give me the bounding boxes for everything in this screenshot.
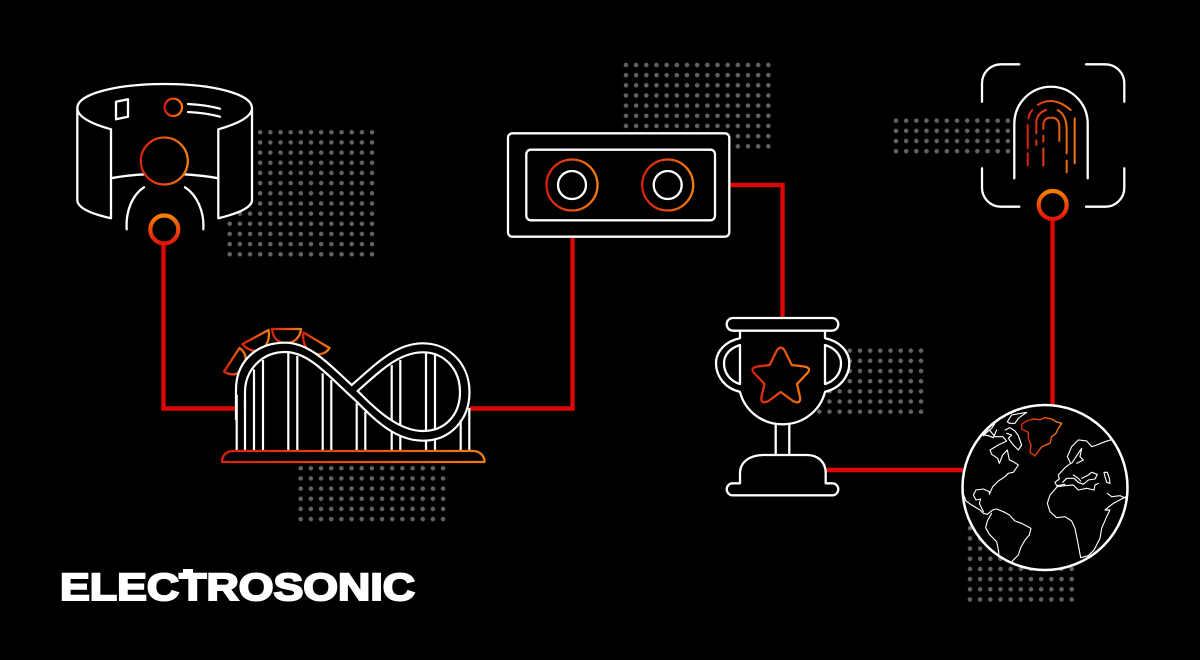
dot pattern: below roller coaster (296, 463, 448, 524)
star (752, 348, 809, 402)
icon: roller coaster (222, 329, 484, 462)
globe disc (962, 405, 1128, 570)
handle inner cut (724, 345, 841, 384)
small gradient circle (165, 99, 182, 116)
node ring (150, 216, 178, 244)
fingerprint ridges (1028, 101, 1075, 172)
right lens (642, 160, 693, 210)
top rim (727, 318, 838, 331)
icon: fingerprint scanner (982, 64, 1124, 219)
track fill mask (236, 343, 470, 441)
node ring (1039, 191, 1067, 219)
person shoulders (127, 187, 203, 229)
floor arcs (111, 174, 218, 178)
coaster cars (224, 329, 330, 374)
base (727, 455, 838, 495)
cylinder mask (77, 84, 252, 218)
outer track (236, 343, 470, 441)
dot pattern: left of fingerprint (891, 116, 1013, 156)
dot pattern: behind trophy (814, 346, 926, 417)
connector: trophy to globe (825, 468, 963, 472)
connector: immersive screen to roller coaster (164, 244, 237, 408)
continents (963, 412, 1126, 563)
person head (141, 138, 188, 184)
small panel rectangle (116, 99, 128, 119)
connector: camera panel to trophy (730, 185, 782, 319)
outer panel (508, 133, 729, 237)
scanner corner brackets (982, 64, 1124, 207)
support columns (237, 352, 469, 450)
trophy handles (716, 338, 849, 392)
dot pattern: behind cylinder screen (225, 127, 377, 259)
icon: camera panel (508, 133, 729, 237)
cup mask (740, 331, 825, 424)
inner loop (358, 352, 460, 431)
connector: fingerprint to globe (1050, 218, 1055, 406)
stylised t ascender (183, 569, 193, 577)
inner panel (526, 150, 715, 220)
text lines (188, 104, 220, 117)
icon: immersive cylinder screen (77, 84, 252, 244)
icon: globe (962, 405, 1128, 570)
stem (776, 424, 789, 455)
left lens (546, 160, 598, 210)
dot pattern: behind camera panel (621, 60, 774, 152)
cup outline (740, 331, 825, 424)
connector: roller coaster to camera panel (470, 236, 572, 408)
coaster base (222, 451, 484, 462)
icon: trophy (716, 318, 849, 495)
cylinder screen outline (77, 84, 252, 218)
Greenland (1022, 418, 1062, 456)
dot pattern: below globe (965, 523, 1077, 605)
wordmark text: ELECTROSONIC (60, 567, 415, 609)
logo: Electrosonic wordmark (60, 567, 415, 609)
fingertip outline (1014, 87, 1088, 178)
